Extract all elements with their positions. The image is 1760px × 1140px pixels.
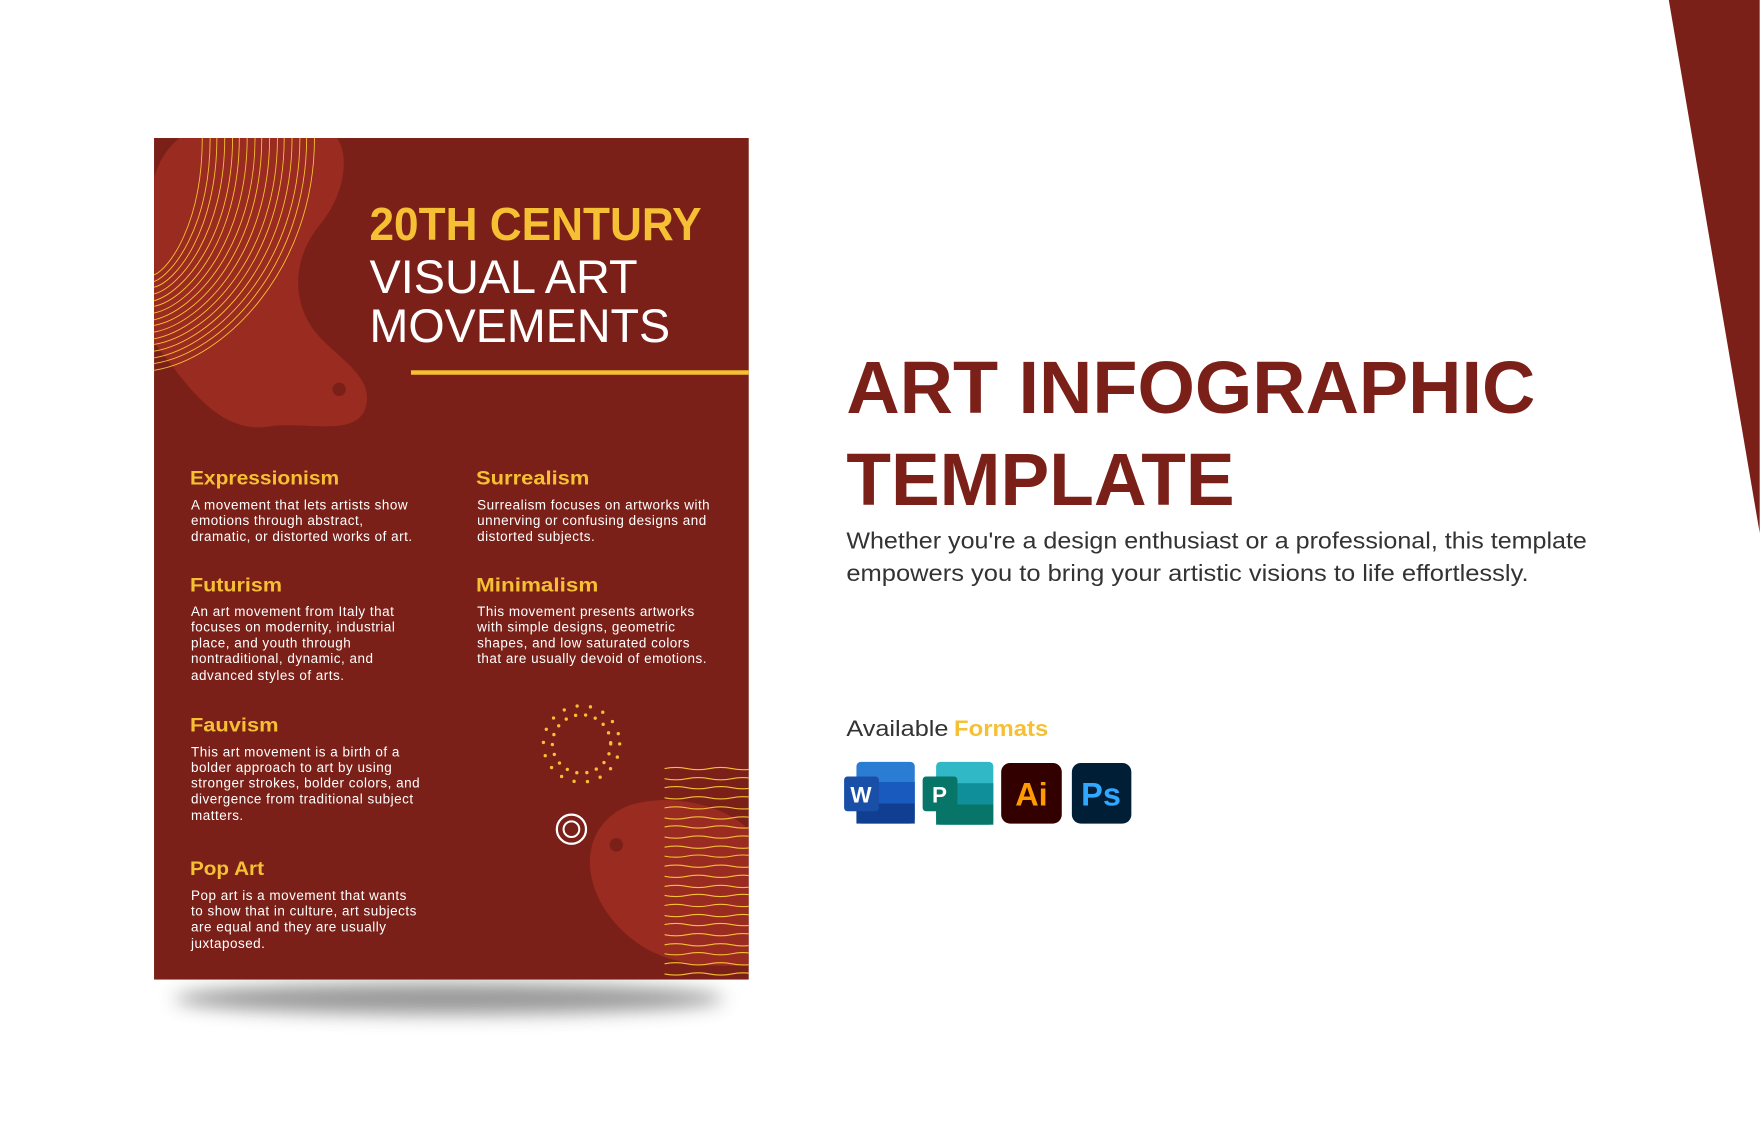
icon: Photoshop bbox=[1072, 763, 1131, 824]
panel shadow bbox=[174, 983, 724, 1014]
movement: Surrealism: unnerving or confusing designs and bbox=[477, 513, 707, 528]
movement: Surrealism: Surrealism bbox=[476, 469, 589, 490]
movement: Expressionism: emotions through abstract, bbox=[191, 513, 363, 528]
icon: dotted circle bbox=[543, 706, 620, 782]
movement: Fauvism: matters. bbox=[191, 808, 244, 823]
main heading: TEMPLATE bbox=[846, 438, 1235, 521]
movement: Fauvism: bolder approach to art by using bbox=[191, 760, 392, 775]
movement: Expressionism: Expressionism bbox=[190, 469, 339, 490]
movement: Futurism: nontraditional, dynamic, and bbox=[191, 651, 373, 666]
movement: Futurism: An art movement from Italy that bbox=[191, 604, 394, 619]
icon: Word: W bbox=[850, 782, 872, 807]
movement: Futurism: focuses on modernity, industrial bbox=[191, 620, 395, 635]
movement: Fauvism: Fauvism bbox=[190, 716, 279, 737]
movement: Pop Art: juxtaposed. bbox=[190, 936, 265, 951]
movement: Futurism: place, and youth through bbox=[191, 635, 351, 650]
movement: Surrealism: distorted subjects. bbox=[477, 529, 595, 544]
icon: Publisher bbox=[923, 762, 993, 825]
movement: Surrealism: Surrealism focuses on artworks with bbox=[477, 497, 710, 512]
movement: Fauvism: divergence from traditional subject bbox=[191, 791, 414, 806]
icon: Photoshop: Ps bbox=[1081, 777, 1121, 813]
movement: Fauvism: stronger strokes, bolder colors, and bbox=[191, 776, 420, 791]
movement: Pop Art: Pop art is a movement that wants bbox=[191, 888, 407, 903]
description bbox=[846, 528, 1587, 586]
blob dot bbox=[332, 383, 346, 396]
title bbox=[369, 198, 702, 352]
movement: Futurism bbox=[190, 575, 395, 683]
movement: Pop Art bbox=[190, 859, 417, 951]
icon: Illustrator: Ai bbox=[1015, 777, 1048, 813]
movement: Pop Art: Pop Art bbox=[190, 859, 265, 880]
movement: Surrealism bbox=[476, 469, 710, 544]
main heading: ART INFOGRAPHIC bbox=[846, 346, 1535, 429]
bottom-right blob bbox=[590, 800, 749, 966]
description: empowers you to bring your artistic visions to life effortlessly. bbox=[846, 560, 1529, 586]
movement: Futurism: Futurism bbox=[190, 575, 282, 596]
movement: Pop Art: are equal and they are usually bbox=[191, 919, 386, 934]
icon: Publisher: P bbox=[932, 782, 947, 807]
movement: Expressionism: A movement that lets artists show bbox=[191, 497, 408, 512]
decorative corner shape bbox=[1669, 0, 1760, 533]
main heading bbox=[846, 346, 1535, 521]
poster panel bbox=[154, 138, 754, 980]
available formats label: Formats bbox=[954, 716, 1048, 741]
movement: Expressionism bbox=[190, 469, 413, 544]
icon: concentric circle bbox=[557, 815, 586, 844]
icon: Word bbox=[844, 762, 915, 824]
movement: Minimalism: with simple designs, geometric bbox=[476, 620, 676, 635]
movement: Minimalism: This movement presents artworks bbox=[477, 604, 695, 619]
movement: Expressionism: dramatic, or distorted works of art. bbox=[191, 529, 413, 544]
description: Whether you're a design enthusiast or a professional, this template bbox=[846, 528, 1587, 554]
movement: Minimalism bbox=[476, 575, 707, 666]
title underline bbox=[411, 370, 749, 375]
available formats label bbox=[846, 716, 1048, 741]
wavy lines bbox=[665, 767, 754, 975]
movement: Fauvism: This art movement is a birth of a bbox=[191, 744, 400, 759]
yellow line fan bbox=[154, 138, 314, 370]
title: MOVEMENTS bbox=[369, 299, 670, 352]
available formats label: Available bbox=[846, 716, 948, 741]
movement: Minimalism: shapes, and low saturated colors bbox=[477, 635, 690, 650]
movement: Pop Art: to show that in culture, art subjects bbox=[191, 904, 417, 919]
icon: Illustrator bbox=[1001, 763, 1062, 824]
movement: Fauvism bbox=[190, 716, 420, 823]
movement: Futurism: advanced styles of arts. bbox=[191, 668, 345, 683]
title: VISUAL ART bbox=[369, 250, 638, 303]
top-left blob bbox=[154, 138, 367, 427]
title: 20TH CENTURY bbox=[369, 198, 702, 250]
movement: Minimalism: Minimalism bbox=[476, 575, 598, 596]
movement: Minimalism: that are usually devoid of emotions. bbox=[477, 651, 707, 666]
